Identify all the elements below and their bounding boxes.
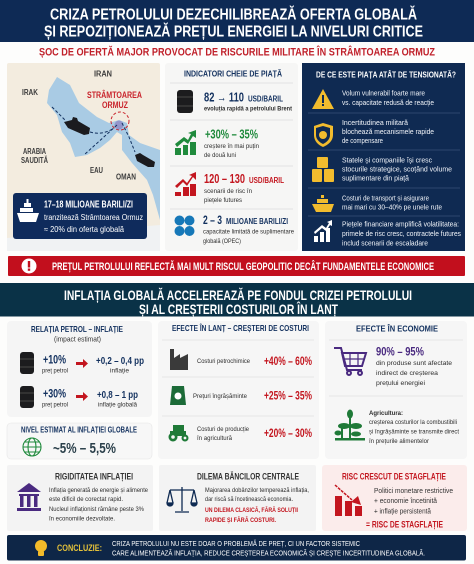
- panel: economic effects: EFECTE ÎN ECONOMIE: [356, 322, 438, 334]
- panel: key market indicators: [165, 63, 298, 251]
- panel: key market indicators: INDICATORI CHEIE DE PIAȚĂ: [184, 68, 282, 78]
- callout: oil transit volume: ≈ 20% din oferta globală: [44, 225, 125, 234]
- icon: barrel: [20, 352, 34, 374]
- item: financial volatility: Piețele financiare amplifică volatilitatea:: [342, 220, 459, 228]
- indicator: thirty percent growth: creștere în mai puțin: [204, 143, 259, 150]
- indicator: OPEC spare capacity: globală (OPEC): [203, 238, 241, 245]
- banner: geopolitic risk message: [8, 256, 465, 276]
- icon: shield: [314, 123, 333, 147]
- panel: chain effects: [158, 321, 319, 459]
- banner: conclusion: CRIZA PETROLULUI NU ESTE DOAR O PROBLEMĂ DE PREȚ, CI UN FACTOR SISTEMIC: [112, 539, 360, 548]
- indicator: OPEC spare capacity: capacitate limitată de suplimentare: [203, 228, 294, 236]
- item: high volume low reaction: vs. capacitate redusă de reacție: [342, 98, 434, 107]
- row: agricultural production costs: [168, 425, 312, 442]
- indicator: thirty percent growth: de două luni: [204, 152, 236, 159]
- icon: balance scales: [167, 487, 197, 512]
- icon: exclamation: [22, 258, 36, 274]
- item: military uncertainty: [314, 118, 434, 147]
- icon: shopping cart: [334, 348, 366, 375]
- banner: conclusion: [7, 535, 466, 560]
- row: plus thirty percent: [20, 386, 138, 408]
- row: fertilizer prices: Prețuri îngrășăminte: [193, 393, 247, 400]
- panel: oil-inflation relation: (impact estimat): [54, 334, 101, 344]
- icon: light bulb: [35, 540, 47, 556]
- panel: central banks dilemma: dar riscă să încetinească economia.: [205, 496, 293, 503]
- icon: barrel: [177, 90, 193, 113]
- item: transport costs: Costuri de transport și asigurare: [342, 194, 429, 202]
- row: fertilizer prices: +25% – 35%: [264, 390, 312, 402]
- panel: inflation rigidity: RIGIDITATEA INFLAȚIEI: [55, 472, 133, 482]
- item: military uncertainty: Incertitudinea militară: [342, 118, 409, 127]
- indicator: Brent price: [177, 90, 293, 113]
- row: plus ten percent: +0,2 – 0,4 pp: [96, 355, 144, 367]
- map: country labels: IRAK: [22, 88, 38, 97]
- indicator: Brent price: USD/BARIL: [248, 94, 283, 104]
- icon: factory: [170, 349, 188, 370]
- indicator: OPEC spare capacity: [174, 215, 294, 245]
- map: country labels: EAU: [90, 166, 103, 175]
- row: plus ten percent: preț petrol: [42, 368, 68, 374]
- header: inflation section title: ȘI AL CREȘTERII COSTURILOR ÎN LANȚ: [139, 300, 338, 317]
- map: country labels: SAUDITĂ: [21, 156, 48, 165]
- banner: conclusion: CONCLUZIE:: [57, 543, 102, 554]
- row: plus ten percent: [20, 352, 144, 374]
- callout: oil transit volume: tranzitează Strâmtoarea Ormuz: [44, 213, 143, 222]
- panel: inflation rigidity: Inflația generată de energie și alimente: [49, 487, 148, 494]
- icon: gold ship: [312, 195, 334, 212]
- icon: green rising chart: [175, 130, 196, 155]
- header: oil crisis title: [0, 0, 474, 42]
- panel: central banks dilemma: Majorarea dobânzilor temperează inflația,: [205, 487, 309, 494]
- item: high volume low reaction: [312, 88, 434, 109]
- icon: globe: [23, 438, 41, 456]
- map: Strait of Hormuz label: STRÂMTOAREA: [87, 89, 142, 100]
- item: financial volatility: includ scenarii de escaladare: [342, 238, 428, 248]
- callout: oil transit volume: 17–18 MILIOANE BARILI/ZI: [44, 200, 133, 210]
- row: plus thirty percent: preț petrol: [42, 402, 68, 408]
- icon: tanker in gulf: [64, 117, 90, 135]
- panel: economic effects: și îngrășăminte se transmite direct: [369, 428, 459, 436]
- panel: stagflation risk: [322, 465, 467, 531]
- panel: estimated global inflation: [7, 423, 152, 459]
- indicator: OPEC spare capacity: 2 – 3: [203, 215, 222, 227]
- icon: crop plants: [334, 410, 365, 440]
- indicator: risk scenario price: piețele futures: [204, 197, 243, 204]
- panel: central banks dilemma: [159, 465, 316, 531]
- icon: OPEC circles: [174, 216, 194, 236]
- row: petrochemical costs: +40% – 60%: [264, 356, 312, 368]
- arrow: [76, 392, 88, 401]
- panel: central banks dilemma: DILEMA BĂNCILOR CENTRALE: [197, 472, 299, 482]
- map: strait circle and shipping routes: [52, 107, 135, 155]
- item: high volume low reaction: Volum vulnerabil foarte mare: [342, 88, 425, 98]
- panel: inflation rigidity: este dificil de corectat rapid.: [49, 496, 123, 503]
- panel: estimated global inflation: ~5% – 5,5%: [53, 441, 116, 457]
- row: agricultural production costs: Costuri de producție: [197, 426, 249, 433]
- panel: chain effects: EFECTE ÎN LANȚ – CREȘTERI DE COSTURI: [172, 322, 309, 333]
- item: military uncertainty: blochează mecanismele rapide: [342, 127, 434, 136]
- arrow: [76, 359, 88, 368]
- row: petrochemical costs: Costuri petrochimice: [197, 358, 250, 365]
- icon: bank building: [17, 483, 41, 511]
- map: Strait of Hormuz label: [87, 89, 142, 110]
- panel: inflation rigidity: [7, 465, 153, 531]
- indicator: risk scenario price: [175, 172, 284, 204]
- row: plus thirty percent: +0,8 – 1 pp: [97, 389, 138, 401]
- row: agricultural production costs: +20% – 30%: [264, 428, 312, 440]
- item: financial volatility: [314, 220, 461, 248]
- panel: oil-inflation relation: RELAȚIA PETROL – INFLAȚIE: [31, 324, 123, 334]
- map: country labels: OMAN: [116, 172, 136, 182]
- icon: warning triangle: [312, 89, 334, 109]
- icon: barrel: [20, 386, 34, 408]
- panel: stagflation risk: Politici monetare restrictive: [374, 486, 453, 495]
- map: country labels: [21, 70, 136, 182]
- item: strategic stocks: stocurile strategice, scoțând volume: [342, 164, 452, 174]
- panel: stagflation risk: = RISC DE STAGFLAȚIE: [366, 520, 443, 530]
- indicator: Brent price: 82 → 110: [204, 90, 244, 104]
- row: agricultural production costs: în agricultură: [196, 435, 232, 442]
- row: plus ten percent: +10%: [43, 354, 66, 366]
- panel: stagflation risk: + economie încetinită: [374, 496, 438, 505]
- icon: tanker in gulf of Oman: [135, 153, 155, 167]
- indicator: thirty percent growth: +30% – 35%: [205, 128, 258, 142]
- row: plus thirty percent: inflație globală: [98, 402, 137, 408]
- panel: central banks dilemma: RAPIDE ȘI FĂRĂ COSTURI.: [205, 515, 276, 524]
- panel: inflation rigidity: Nucleul inflaționist rămâne peste 3%: [49, 506, 144, 513]
- indicator: OPEC spare capacity: MILIOANE BARILI/ZI: [226, 217, 288, 226]
- panel: economic effects: creșterea costurilor la combustibili: [369, 419, 457, 426]
- item: strategic stocks: suplimentare din piață: [342, 174, 410, 182]
- map: country labels: ARABIA: [23, 147, 46, 156]
- panel: oil-inflation relation: [7, 321, 152, 417]
- header: inflation section title: [0, 283, 474, 317]
- icon: tractor: [168, 425, 188, 442]
- item: strategic stocks: Statele și companiile își cresc: [342, 156, 432, 164]
- icon: falling bar chart: [335, 485, 362, 516]
- panel: economic effects: [325, 321, 467, 459]
- item: strategic stocks: [312, 156, 452, 182]
- indicator: risk scenario price: scenarii de risc în: [204, 188, 252, 195]
- row: petrochemical costs: [170, 349, 312, 370]
- icon: white rising chart: [314, 220, 332, 242]
- item: military uncertainty: de compensare: [342, 136, 383, 145]
- panel: central banks dilemma: UN DILEMA CLASICĂ, FĂRĂ SOLUȚII: [205, 505, 298, 514]
- map: Strait of Hormuz label: ORMUZ: [102, 100, 128, 110]
- panel: economic effects: 90% – 95%: [376, 344, 424, 358]
- callout: oil transit volume: [13, 193, 147, 239]
- icon: red rising chart: [175, 172, 196, 196]
- map: country labels: IRAN: [94, 70, 112, 78]
- icon: gold barrels: [312, 157, 334, 182]
- indicator: risk scenario price: USD/BARIL: [249, 176, 284, 185]
- panel: economic effects: din produse sunt afectate: [376, 360, 452, 367]
- panel: economic effects: în prețurile alimentelor: [368, 438, 430, 445]
- panel: why the market is tense: [302, 63, 465, 251]
- row: fertilizer prices: [170, 386, 312, 405]
- item: transport costs: [312, 194, 442, 212]
- icon: cargo ship: [17, 199, 39, 222]
- panel: estimated global inflation: NIVEL ESTIMAT AL INFLAȚIEI GLOBALE: [21, 426, 137, 434]
- icon: fertilizer bag: [170, 386, 186, 405]
- indicator: risk scenario price: 120 – 130: [204, 172, 245, 186]
- item: financial volatility: primele de risc cresc, contractele futures: [342, 229, 461, 238]
- panel: economic effects: indirect de creșterea: [376, 370, 438, 377]
- panel: economic effects: prețului energiei: [376, 380, 425, 387]
- panel: economic effects: Agricultura:: [369, 410, 403, 417]
- indicator: Brent price: evoluția rapidă a petrolului Brent: [204, 106, 293, 112]
- panel: stagflation risk: + inflație persistentă: [374, 506, 432, 516]
- map: Gulf and Gulf of Oman water: [47, 77, 160, 220]
- row: plus thirty percent: +30%: [43, 388, 66, 400]
- item: transport costs: mai mari cu 30–40% pe unele rute: [342, 202, 442, 212]
- panel: Hormuz map: [7, 63, 160, 251]
- panel: inflation rigidity: în economiile dezvoltate.: [48, 516, 115, 522]
- indicator: thirty percent growth: [175, 128, 259, 159]
- row: plus ten percent: inflație: [110, 368, 129, 374]
